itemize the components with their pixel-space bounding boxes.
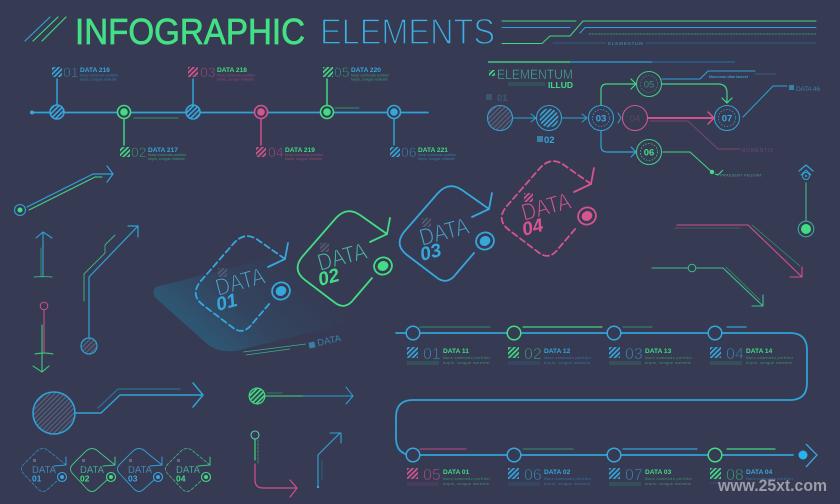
item 03: 03 — [625, 346, 643, 363]
label 06: turpis, congue molestie — [418, 157, 455, 161]
mini callout 02: DATA — [80, 464, 104, 476]
item 07: 07 — [625, 467, 643, 484]
flow node 05 — [636, 72, 662, 96]
item 05: DATA 01 — [443, 469, 470, 476]
flow node plain hatch — [488, 106, 512, 130]
item 07 — [609, 467, 693, 486]
mini callout 02 — [70, 448, 116, 492]
caption: data — [243, 333, 343, 355]
mini callout 04: 04 — [176, 474, 186, 484]
arrow: hatched green node — [249, 387, 353, 404]
label 02: 02 — [131, 144, 147, 160]
arrow: up — [34, 232, 52, 277]
mini callout 03: DATA — [128, 464, 152, 476]
callout: data 01 — [196, 236, 293, 331]
item 01: Nunc commodo porttitor — [443, 356, 491, 360]
item 03: DATA 13 — [645, 348, 672, 355]
flow node 04: 04 — [630, 114, 640, 124]
flow labels — [486, 75, 820, 178]
item 06: 06 — [524, 467, 542, 484]
node 06 — [388, 106, 400, 118]
caption: data: DATA — [316, 333, 343, 349]
timeline nodes — [406, 326, 722, 462]
label 05: turpis, congue molestie — [351, 78, 388, 82]
item 01: DATA 11 — [443, 348, 469, 355]
label 01 — [52, 64, 119, 82]
flow node 07: 07 — [722, 114, 732, 124]
title word: infographic: INFOGRAPHIC — [75, 11, 305, 52]
flow labels: 02 — [544, 135, 555, 146]
label 03: 03 — [200, 64, 216, 80]
flowchart heading — [488, 62, 735, 90]
item 05: 05 — [423, 467, 441, 484]
label 06 — [390, 144, 457, 161]
label 01: 01 — [63, 64, 79, 80]
flow node 07 — [714, 106, 740, 130]
item 06 — [508, 467, 592, 486]
label 06: Nunc commodo porttitor — [418, 153, 457, 157]
item 05 — [407, 467, 491, 486]
mini callout 01: 01 — [32, 474, 42, 484]
item 04: turpis, congue molestie — [746, 361, 792, 365]
callout: data 04 — [502, 161, 599, 256]
arrow: big circle — [33, 383, 203, 434]
label 02: DATA 217 — [148, 147, 178, 154]
item 08 — [710, 467, 794, 484]
item 08: Nunc commodo porttitor — [746, 477, 794, 481]
item 07: Nunc commodo porttitor — [645, 477, 693, 481]
timeline path — [396, 327, 807, 455]
callout: data 02: 02 — [316, 265, 342, 291]
timeline: data 216 to 221 — [30, 64, 457, 161]
callout: data 01: DATA — [213, 263, 268, 302]
item 06: turpis, congue molestie — [544, 482, 590, 486]
flow labels: DATA 46 — [796, 86, 820, 93]
flow node 03 — [588, 106, 614, 130]
flow node hatch — [536, 106, 562, 130]
arrow: corner blue — [317, 433, 341, 488]
item 04: Nunc commodo porttitor — [746, 356, 794, 360]
flow node 06 — [636, 140, 662, 164]
flow labels: 01 — [497, 93, 508, 104]
label 06: 06 — [401, 144, 417, 160]
item 04: DATA 14 — [746, 348, 773, 355]
callout: data 04: 04 — [520, 215, 546, 241]
node 03 — [186, 105, 200, 119]
callout: data 04: DATA — [519, 188, 574, 227]
item 02: 02 — [524, 346, 542, 363]
mini callout 04 — [166, 448, 210, 492]
item 07: DATA 03 — [645, 469, 672, 476]
item 01 — [407, 346, 491, 365]
flow node 06: 06 — [644, 148, 654, 158]
item 02 — [508, 346, 592, 365]
mini callout 04: DATA — [176, 464, 200, 476]
flowchart heading: ILLUD — [548, 80, 573, 90]
item 06: DATA 02 — [544, 469, 571, 476]
label 04: turpis, congue molestie — [285, 157, 322, 161]
item 04 — [710, 346, 794, 365]
flow node 05: 05 — [644, 80, 654, 90]
label 03: DATA 218 — [217, 67, 247, 74]
flow labels: ROMENTIS — [742, 148, 774, 154]
mini callout 01 — [22, 448, 66, 492]
item 06: Nunc commodo porttitor — [544, 477, 592, 481]
arrow: green angled with node — [652, 264, 763, 306]
title — [25, 11, 495, 52]
node 01 — [50, 105, 64, 119]
item 02: DATA 12 — [544, 348, 571, 355]
label 04: DATA 219 — [285, 147, 315, 154]
item 01: turpis, congue molestie — [443, 361, 489, 365]
callout: data 02 — [298, 211, 395, 306]
label 03: turpis, congue molestie — [217, 78, 254, 82]
item 08: 08 — [726, 467, 744, 484]
arrow: double diagonal — [14, 166, 113, 216]
header circuit lines — [502, 21, 816, 47]
item 02: Nunc commodo porttitor — [544, 356, 592, 360]
label 02 — [120, 144, 187, 161]
watermark: www.25xt.com — [717, 476, 827, 495]
flow node 03: 03 — [596, 114, 606, 124]
flowchart: elementum illud — [486, 62, 820, 178]
winding timeline — [396, 326, 817, 486]
mini callout 01: DATA — [32, 464, 56, 476]
label 03: Nunc commodo porttitor — [217, 74, 256, 78]
flow node 04 — [622, 106, 648, 130]
label: elementum: ELEMENTUM — [608, 41, 643, 47]
item 01: 01 — [423, 346, 441, 363]
label 05 — [323, 64, 390, 82]
arrow: pink angled — [675, 225, 802, 277]
node 04 — [254, 106, 268, 118]
item 03: Nunc commodo porttitor — [645, 356, 693, 360]
item 03: turpis, congue molestie — [645, 361, 691, 365]
label 04: Nunc commodo porttitor — [285, 153, 324, 157]
item 03 — [609, 346, 693, 365]
label 05: 05 — [334, 64, 350, 80]
label 03 — [188, 64, 256, 82]
mini callout 02: 02 — [80, 474, 90, 484]
label 01: Nunc commodo porttitor — [80, 74, 119, 78]
callout: data 03 — [400, 186, 497, 281]
flow labels: PRAESENT FEUGIAT — [720, 172, 763, 178]
timeline axis — [30, 79, 428, 145]
label 06: DATA 221 — [418, 147, 448, 154]
callout: data 01: 01 — [214, 290, 240, 316]
mini callout 03: 03 — [128, 474, 138, 484]
mini callout 03 — [118, 448, 162, 492]
node 05 — [320, 106, 334, 118]
label 05: Nunc commodo porttitor — [351, 74, 390, 78]
node 02 — [118, 106, 130, 118]
item 05: turpis, congue molestie — [443, 482, 489, 486]
callout: data 03: 03 — [418, 240, 444, 266]
label 02: Nunc commodo porttitor — [148, 153, 187, 157]
label 04 — [256, 144, 324, 161]
arrow: corner pink — [251, 431, 297, 497]
arrow: elbow from hatched node — [81, 226, 138, 354]
connectors — [513, 71, 787, 172]
item 02: turpis, congue molestie — [544, 361, 590, 365]
label 01: turpis, congue molestie — [80, 78, 117, 82]
shadow panel — [153, 216, 490, 351]
callout: data 03: DATA — [417, 213, 472, 252]
callout: data 02: DATA — [315, 238, 370, 277]
timeline end arrow — [798, 444, 817, 467]
label 01: DATA 216 — [80, 67, 110, 74]
item 08: DATA 04 — [746, 469, 773, 476]
icon: title slashes — [25, 17, 66, 41]
flow labels: Maecenas vitae laoreet — [709, 75, 749, 79]
item 04: 04 — [726, 346, 744, 363]
item 07: turpis, congue molestie — [645, 482, 691, 486]
arrow: down with pin — [33, 302, 53, 372]
label 05: DATA 220 — [351, 67, 381, 74]
flowchart heading: ELEMENTUM — [497, 66, 573, 82]
label 04: 04 — [268, 144, 284, 160]
icon: vertical pin — [798, 165, 814, 237]
item 05: Nunc commodo porttitor — [443, 477, 491, 481]
title word: elements: ELEMENTS — [320, 11, 495, 52]
label 02: turpis, congue molestie — [148, 157, 185, 161]
